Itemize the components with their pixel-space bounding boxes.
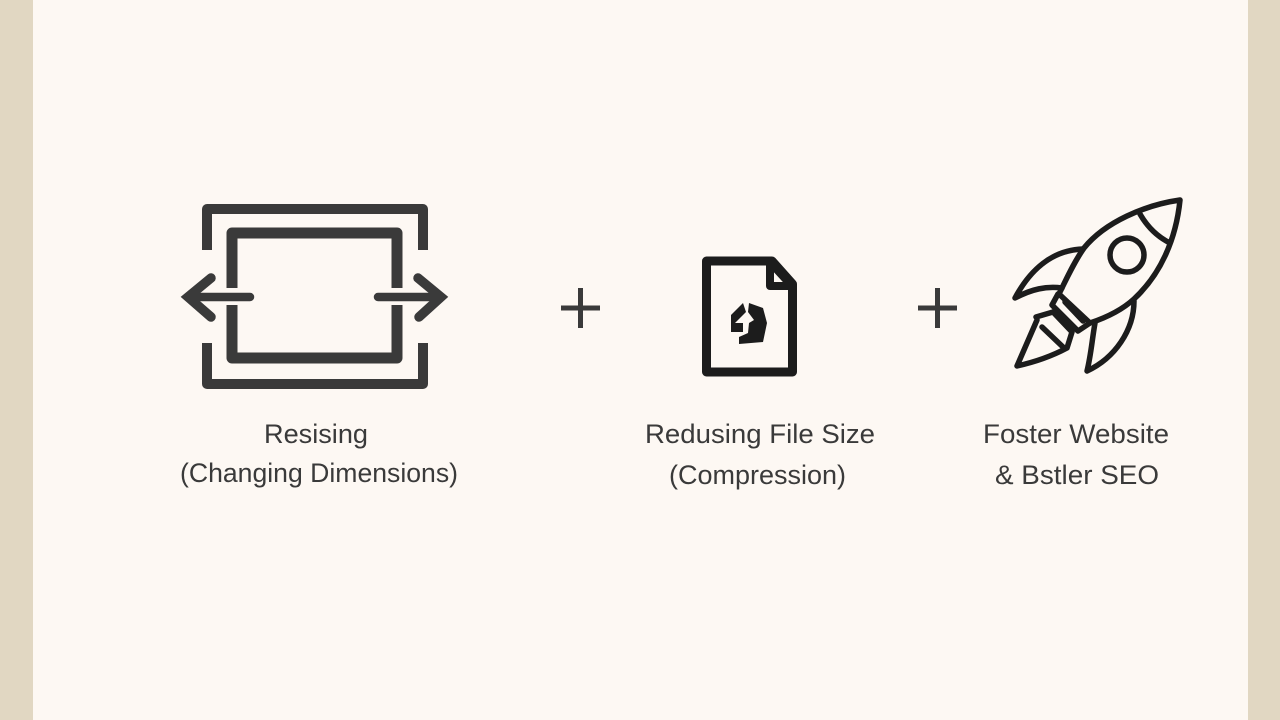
file outline: [706, 261, 792, 372]
label: faster website and better SEO: [983, 419, 1169, 490]
rocket body: [1059, 200, 1180, 323]
label: resizing: (Changing Dimensions): [180, 458, 458, 488]
glyph left piece: [731, 303, 746, 332]
icon: rocket: [1015, 200, 1180, 371]
plus sign 2: [918, 288, 957, 328]
inner rectangle: [232, 233, 397, 358]
label: resizing: Resising: [264, 419, 368, 449]
left side band: [0, 0, 33, 720]
label: reducing file size: (Compression): [669, 460, 846, 490]
glyph right piece: [739, 303, 767, 344]
left fin: [1015, 249, 1083, 298]
compression glyph: [731, 303, 767, 344]
left arrow: [188, 278, 250, 317]
outer frame bottom bracket: [207, 343, 423, 384]
label: reducing file size: Redusing File Size: [645, 419, 875, 449]
outer frame top bracket: [207, 209, 423, 250]
label: resizing: [180, 419, 458, 488]
label: faster website and better SEO: & Bstler SEO: [995, 460, 1159, 490]
label: reducing file size: [645, 419, 875, 490]
label: faster website and better SEO: Foster Website: [983, 419, 1169, 449]
plus sign 1: [561, 288, 600, 328]
icon: compressed file: [706, 261, 792, 372]
right arrow: [378, 278, 441, 317]
folded corner: [770, 262, 792, 286]
right side band: [1248, 0, 1280, 720]
nozzle: [1052, 294, 1090, 331]
right fin: [1087, 301, 1134, 371]
icon: resize frame with arrows: [188, 209, 441, 384]
flame: [1017, 312, 1072, 366]
nose cone line: [1140, 214, 1170, 243]
window: [1110, 238, 1144, 272]
